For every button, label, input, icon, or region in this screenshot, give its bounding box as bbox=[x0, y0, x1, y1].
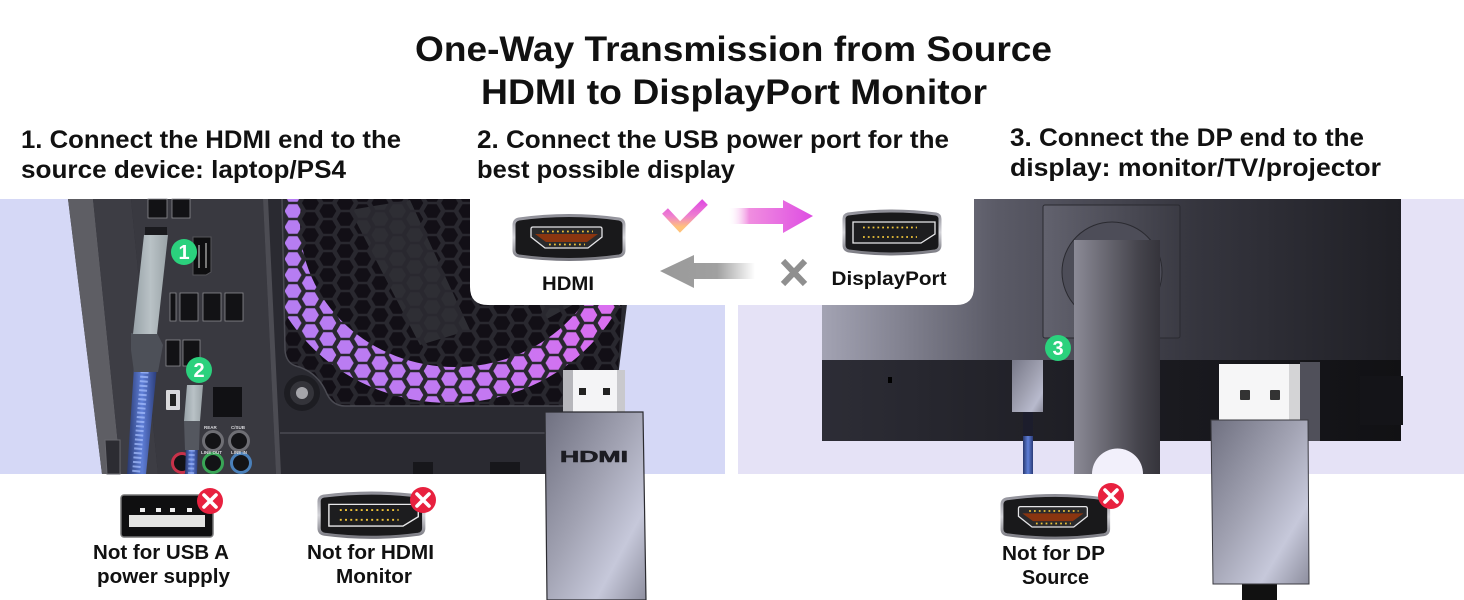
VESA mount bbox=[1043, 205, 1180, 338]
large DisplayPort connector bbox=[1211, 364, 1309, 600]
warning: not for DP source: Source bbox=[1022, 567, 1089, 589]
warning: not for DP source: Not for DP bbox=[1002, 543, 1105, 565]
panel: right background bbox=[738, 199, 1464, 474]
warning: not for HDMI monitor: Not for HDMI bbox=[307, 542, 434, 564]
title: One-Way Transmission from Source bbox=[415, 30, 1052, 69]
mini port bbox=[166, 390, 180, 410]
icon: HDMI port bbox=[514, 216, 624, 260]
vent grille with purple ring bbox=[285, 199, 622, 406]
warning: not for USB A: power supply bbox=[97, 566, 231, 588]
large HDMI connector bbox=[545, 370, 646, 600]
step 2 text: 2. Connect the USB power port for the bbox=[477, 126, 949, 154]
icon: USB A port bbox=[121, 495, 213, 537]
step 2 text bbox=[477, 126, 949, 184]
step 3 text: 3. Connect the DP end to the bbox=[1010, 124, 1364, 152]
warning: not for USB A: Not for USB A bbox=[93, 542, 229, 564]
step marker 3 bbox=[1045, 335, 1071, 361]
step 1 text: source device: laptop/PS4 bbox=[21, 156, 346, 184]
ethernet port bbox=[213, 387, 242, 417]
step 3 text bbox=[1010, 124, 1381, 182]
screw bbox=[284, 375, 320, 411]
step 3 text: display: monitor/TV/projector bbox=[1010, 154, 1381, 182]
audio labels: REAR bbox=[204, 425, 218, 430]
step 1 text: 1. Connect the HDMI end to the bbox=[21, 126, 401, 154]
PC tower rear bbox=[68, 198, 627, 474]
audio labels: LINE IN bbox=[231, 450, 247, 455]
cable: HDMI into PC bbox=[127, 227, 168, 474]
step marker 2 bbox=[186, 357, 212, 383]
warning: not for HDMI monitor bbox=[307, 487, 436, 588]
white connector card bbox=[470, 199, 974, 305]
monitor rear bbox=[822, 199, 1403, 474]
step 2 text: best possible display bbox=[477, 156, 735, 184]
step 1 text bbox=[21, 126, 401, 184]
cable: small DP plug bbox=[1012, 360, 1043, 474]
icon: DisplayPort port bbox=[844, 211, 940, 254]
title: HDMI to DisplayPort Monitor bbox=[481, 73, 987, 112]
label: DisplayPort: DisplayPort bbox=[832, 269, 947, 290]
icon: cross mark bbox=[783, 261, 805, 284]
step marker 1: 1 bbox=[178, 242, 190, 264]
audio labels: C/SUB bbox=[231, 425, 246, 430]
monitor stand bbox=[1074, 240, 1160, 474]
icon: check mark bbox=[665, 202, 705, 227]
cable: USB power into PC bbox=[184, 385, 203, 474]
panel: left background bbox=[0, 199, 725, 474]
label: HDMI: HDMI bbox=[542, 274, 594, 295]
arrow: HDMI to DisplayPort bbox=[728, 200, 813, 233]
warning: not for HDMI monitor: Monitor bbox=[336, 566, 412, 588]
arrow: blocked direction bbox=[660, 255, 755, 288]
DisplayPort socket bbox=[193, 237, 211, 275]
USB ports bbox=[148, 199, 243, 366]
HDMI logo: HDMI bbox=[560, 449, 628, 466]
warning: not for USB A bbox=[93, 488, 231, 588]
step marker 1 bbox=[171, 239, 197, 265]
warning: not for DP source bbox=[1002, 483, 1124, 589]
audio labels bbox=[201, 425, 247, 455]
step marker 2: 2 bbox=[193, 360, 205, 382]
title bbox=[415, 30, 1052, 112]
audio labels: LINE OUT bbox=[201, 450, 222, 455]
step marker 3: 3 bbox=[1052, 338, 1064, 360]
audio jacks bbox=[172, 432, 250, 472]
